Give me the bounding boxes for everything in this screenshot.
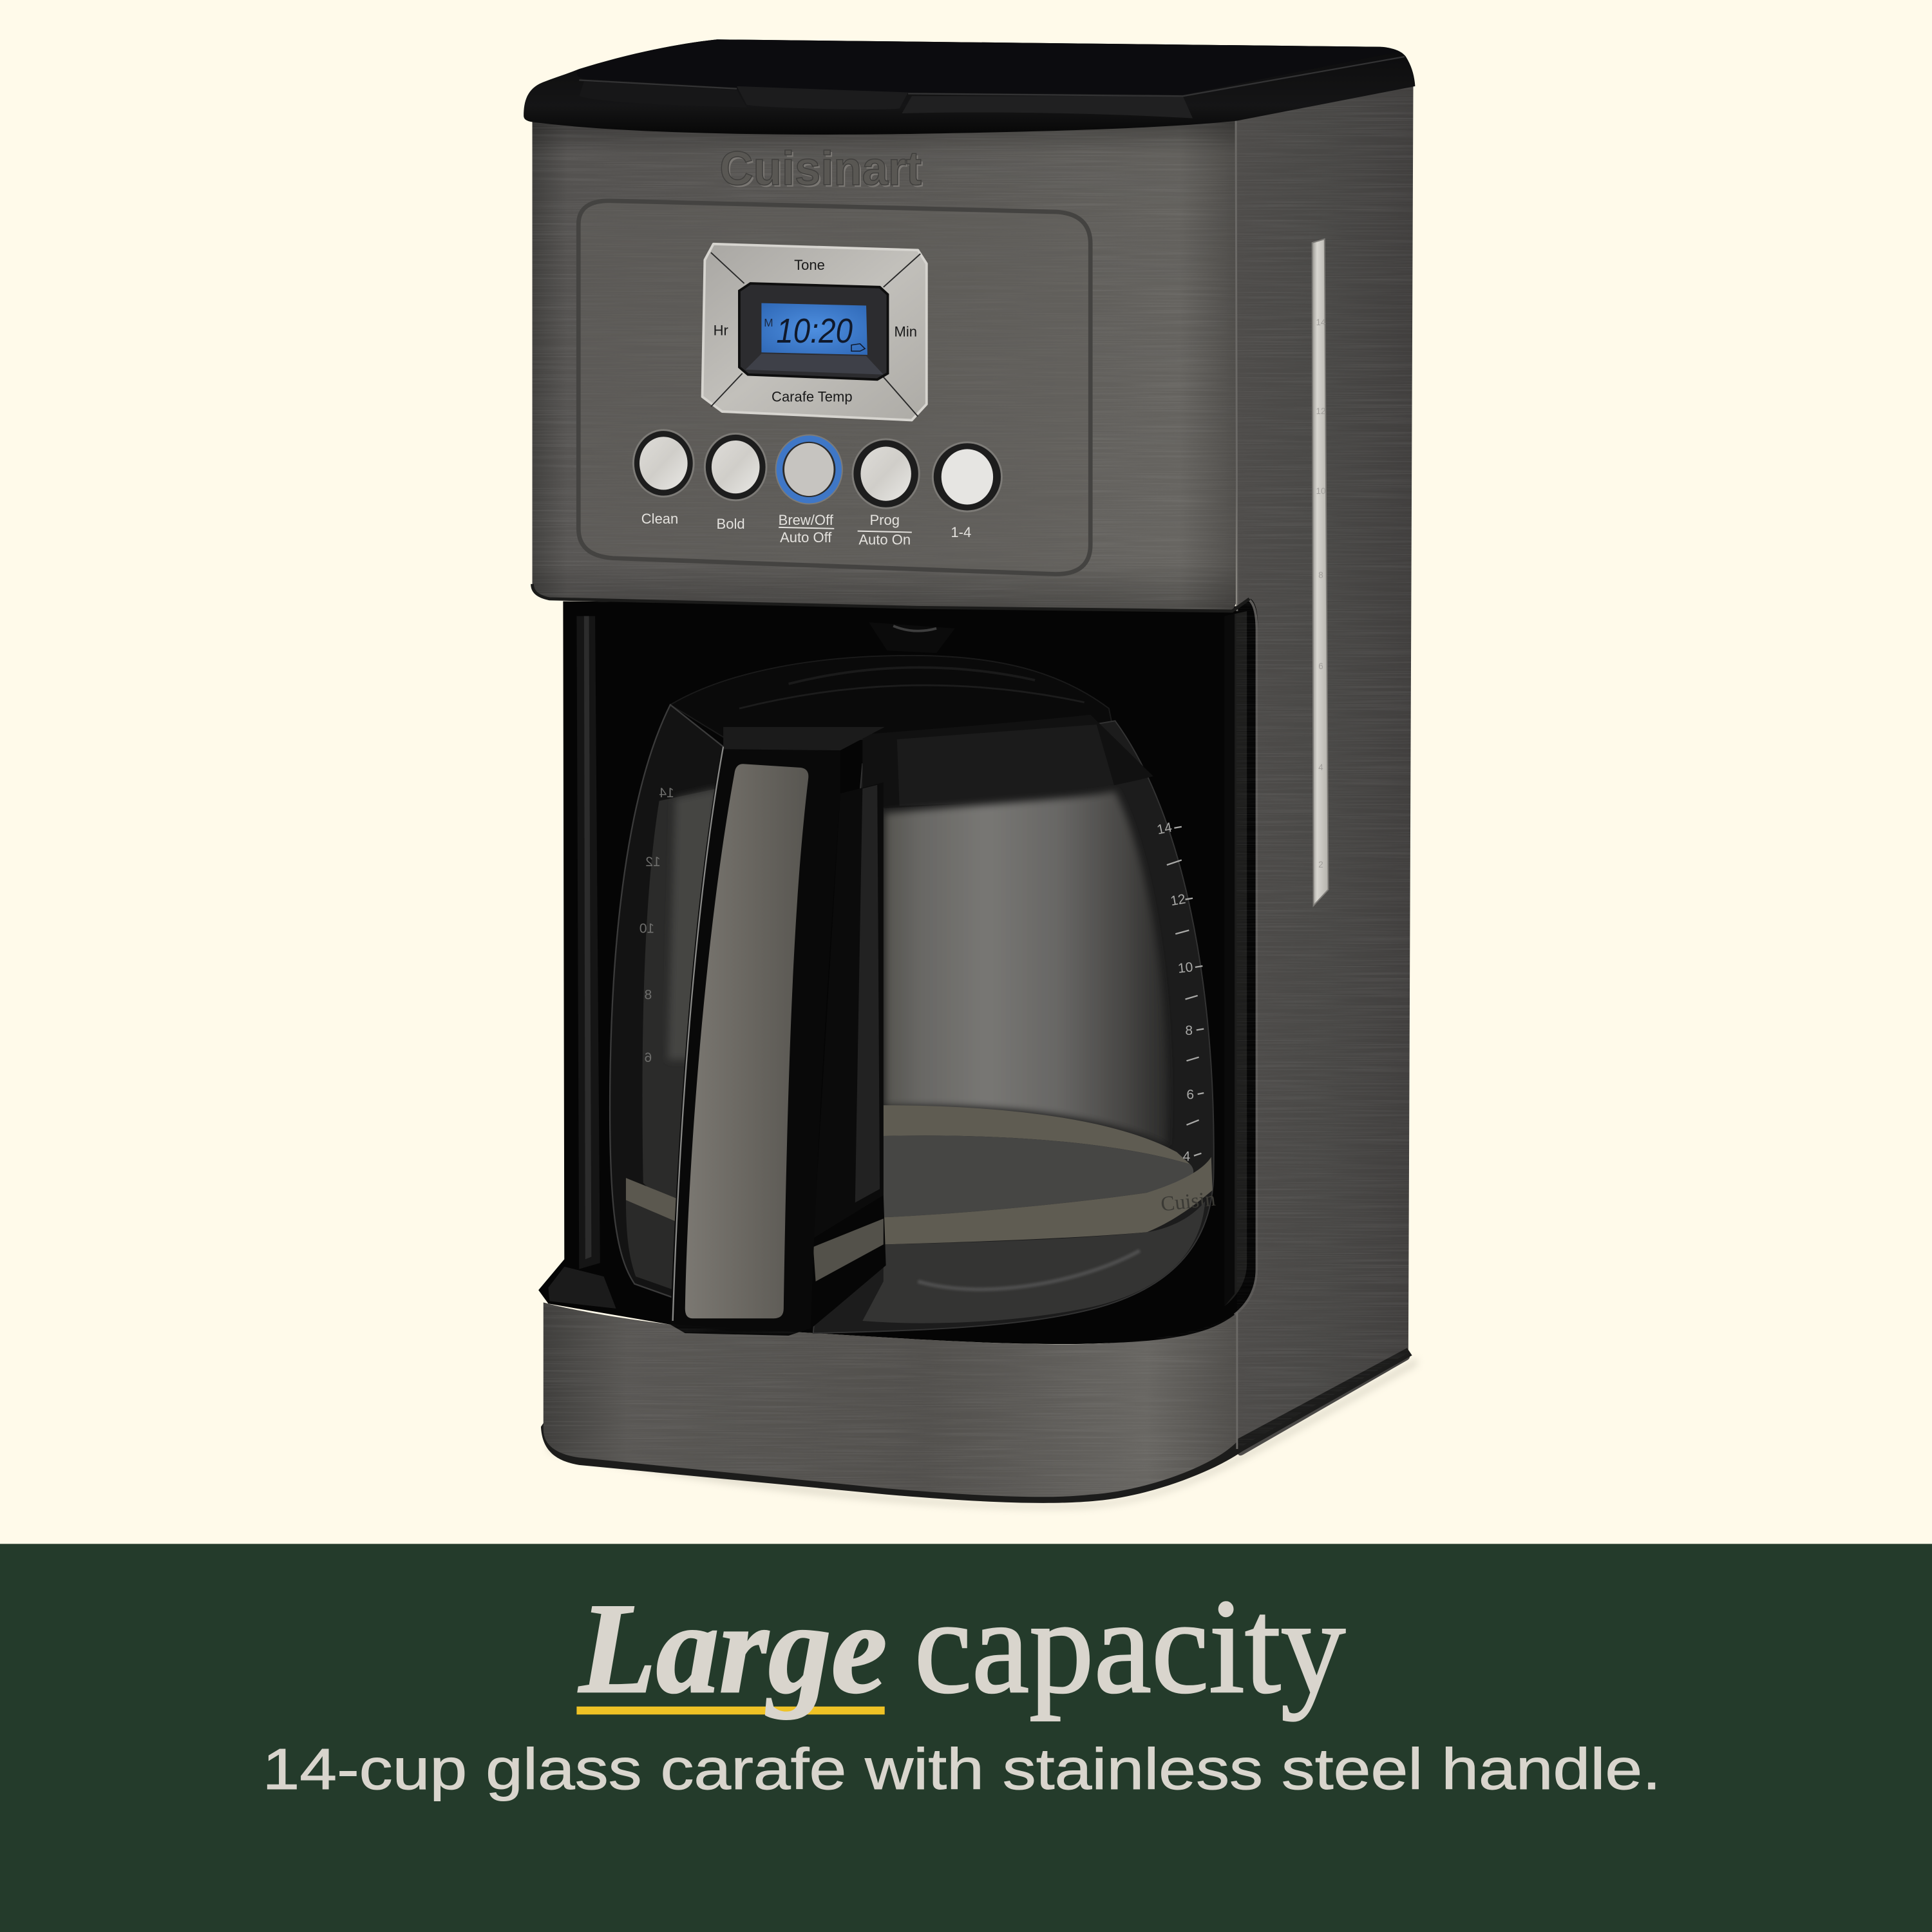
water level window: 12 <box>1316 406 1325 416</box>
button labels: Auto Off <box>780 529 832 545</box>
button labels: Clean <box>641 511 678 527</box>
LCD <box>761 303 867 355</box>
silver display bezel <box>703 244 927 420</box>
Cuisinart logo: Cuisinart <box>721 143 923 197</box>
drip head <box>869 622 955 653</box>
heading second word: capacity <box>914 1571 1345 1721</box>
glass carafe <box>610 656 1217 1336</box>
cavity left wall reflections <box>548 616 616 1309</box>
brushed metal texture <box>518 74 1429 1515</box>
carafe scale right: 10 <box>1177 960 1194 976</box>
upper ring band <box>884 1105 1190 1164</box>
carafe scale mirrored: 8 <box>645 988 652 1003</box>
water level window: 2 <box>1318 860 1323 869</box>
lid front bevel <box>902 96 1193 118</box>
lower ring band <box>884 1157 1213 1244</box>
floor shadow <box>548 1358 1417 1509</box>
carafe scale mirrored: 6 <box>645 1050 652 1065</box>
LCD icon <box>851 344 865 351</box>
handle top cap <box>723 727 885 750</box>
coffee maker <box>518 39 1429 1515</box>
button labels: 1-4 <box>951 524 971 540</box>
housing lower lip <box>533 584 1249 611</box>
button labels <box>641 511 971 548</box>
carafe scale right <box>1155 820 1204 1164</box>
upper front housing <box>533 120 1236 611</box>
water level window: 4 <box>1318 762 1323 772</box>
screen chin <box>746 354 884 375</box>
green caption band <box>0 1544 1932 1932</box>
bezel labels <box>714 257 917 405</box>
handle gap reflection <box>855 785 880 1202</box>
prog button <box>853 439 919 508</box>
water level window: 14 <box>1316 317 1326 327</box>
cavity right frame <box>1225 600 1257 1314</box>
water level window <box>1312 239 1328 905</box>
handle body <box>670 746 840 1336</box>
bottom rim <box>541 1348 1412 1503</box>
carafe scale mirrored: 10 <box>639 921 654 936</box>
carafe left lobe <box>610 705 730 1303</box>
interior bottom water <box>884 1135 1193 1217</box>
bezel labels: Tone <box>794 257 825 273</box>
button labels: Brew/Off <box>779 512 834 528</box>
lid top plate <box>577 39 1399 95</box>
control panel <box>578 201 1090 574</box>
water level window: 8 <box>1318 570 1323 580</box>
lid left bevel <box>579 81 746 107</box>
heading underline <box>576 1707 885 1714</box>
carafe glass foot <box>862 1201 1205 1323</box>
ring through wedge <box>813 1218 884 1282</box>
black lid <box>524 39 1415 135</box>
1-4 button <box>933 442 1001 511</box>
water level window: 6 <box>1318 661 1323 671</box>
bezel labels: Hr <box>714 322 728 338</box>
housing corner seam <box>1236 120 1237 1449</box>
carafe scale right: 14 <box>1155 820 1173 838</box>
Cuisinart logo: Cuisinart <box>719 141 922 195</box>
carafe brand on ring: Cuisin <box>1160 1188 1217 1216</box>
cream background <box>0 0 1932 1544</box>
carafe scale mirrored: 12 <box>645 855 661 869</box>
milky glass interior <box>885 791 1168 1146</box>
panel recess <box>578 201 1090 574</box>
handle wedge <box>801 1195 886 1331</box>
bezel labels: Min <box>895 323 917 339</box>
brew cavity <box>538 599 1258 1344</box>
side panel <box>1236 84 1414 1455</box>
LCD time: 10:20 <box>776 312 853 350</box>
LCD M: M <box>764 316 773 329</box>
carafe scale mirrored: 14 <box>659 786 674 800</box>
foot highlights <box>918 1251 1140 1289</box>
button labels: Auto On <box>858 532 911 548</box>
carafe scale right: 12 <box>1170 891 1187 909</box>
carafe scale right: 6 <box>1186 1088 1194 1103</box>
button labels: Bold <box>717 516 745 532</box>
carafe lid <box>670 656 1115 739</box>
upper housing shading <box>533 120 1236 611</box>
clean button <box>633 430 694 497</box>
lid highlight <box>579 57 1405 96</box>
collar highlight <box>897 724 1115 806</box>
carafe collar <box>862 715 1153 808</box>
handle gap <box>813 782 884 1241</box>
handle steel plate <box>685 764 808 1318</box>
brew button <box>776 435 842 504</box>
lid tab <box>737 86 908 109</box>
water level window: 10 <box>1316 486 1325 496</box>
bold button <box>705 433 766 500</box>
subheading: 14-cup glass carafe with stainless steel handle. <box>263 1738 1661 1802</box>
carafe scale mirrored <box>639 786 674 1065</box>
handle edge highlight <box>673 746 723 1321</box>
carafe body right <box>813 721 1214 1333</box>
bezel dividers <box>711 252 920 417</box>
bezel labels: Carafe Temp <box>772 389 853 405</box>
button labels: Prog <box>869 512 900 528</box>
front base <box>544 1302 1237 1497</box>
screen housing <box>739 283 888 379</box>
carafe scale right: 8 <box>1185 1023 1193 1038</box>
heading first word: Large <box>578 1577 887 1720</box>
carafe scale right: 4 <box>1183 1149 1191 1164</box>
